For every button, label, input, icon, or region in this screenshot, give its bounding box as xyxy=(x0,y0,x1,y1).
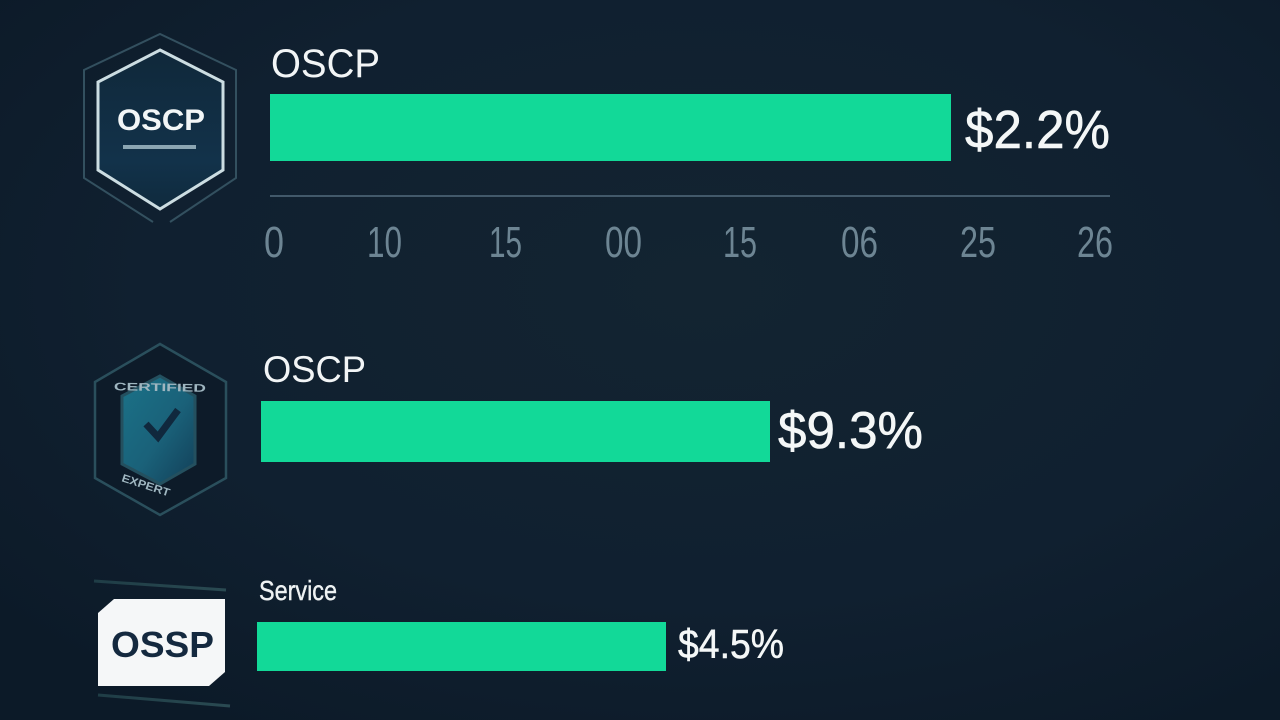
axis tick labels: 15 xyxy=(489,218,522,267)
axis tick labels: 26 xyxy=(1077,218,1113,267)
axis tick labels: 00 xyxy=(605,218,642,267)
icon: OSSP tag badge: OSSP xyxy=(111,624,214,665)
value: $2.2%: $2.2% xyxy=(965,100,1110,160)
row 3: Service xyxy=(94,575,784,706)
icon: OSSP tag badge xyxy=(94,581,230,706)
icon: OSCP hexagon badge: OSCP xyxy=(117,104,205,137)
icon: shield check badge: CERTIFIED xyxy=(114,381,206,395)
axis tick labels: 15 xyxy=(723,218,757,267)
axis tick labels: 06 xyxy=(841,218,878,267)
value: $4.5%: $4.5% xyxy=(678,621,784,667)
axis xyxy=(264,196,1113,267)
bar: OSCP xyxy=(270,94,951,161)
axis tick labels: 10 xyxy=(367,218,402,267)
icon: OSCP hexagon badge xyxy=(84,34,236,222)
row 1: OSCP xyxy=(84,34,1110,222)
icon: shield check badge: EXPERT xyxy=(120,473,172,499)
label: OSCP: OSCP xyxy=(263,349,366,390)
axis tick labels: 25 xyxy=(960,218,996,267)
axis tick labels xyxy=(264,218,1113,267)
label: Service: Service xyxy=(259,575,337,606)
icon: shield check badge xyxy=(95,344,226,515)
value: $9.3%: $9.3% xyxy=(778,402,923,460)
label: OSCP: OSCP xyxy=(271,42,380,86)
row 2: OSCP xyxy=(95,344,923,515)
axis tick labels: 0 xyxy=(264,218,284,267)
bar: OSCP xyxy=(261,401,770,462)
bar: Service xyxy=(257,622,666,671)
